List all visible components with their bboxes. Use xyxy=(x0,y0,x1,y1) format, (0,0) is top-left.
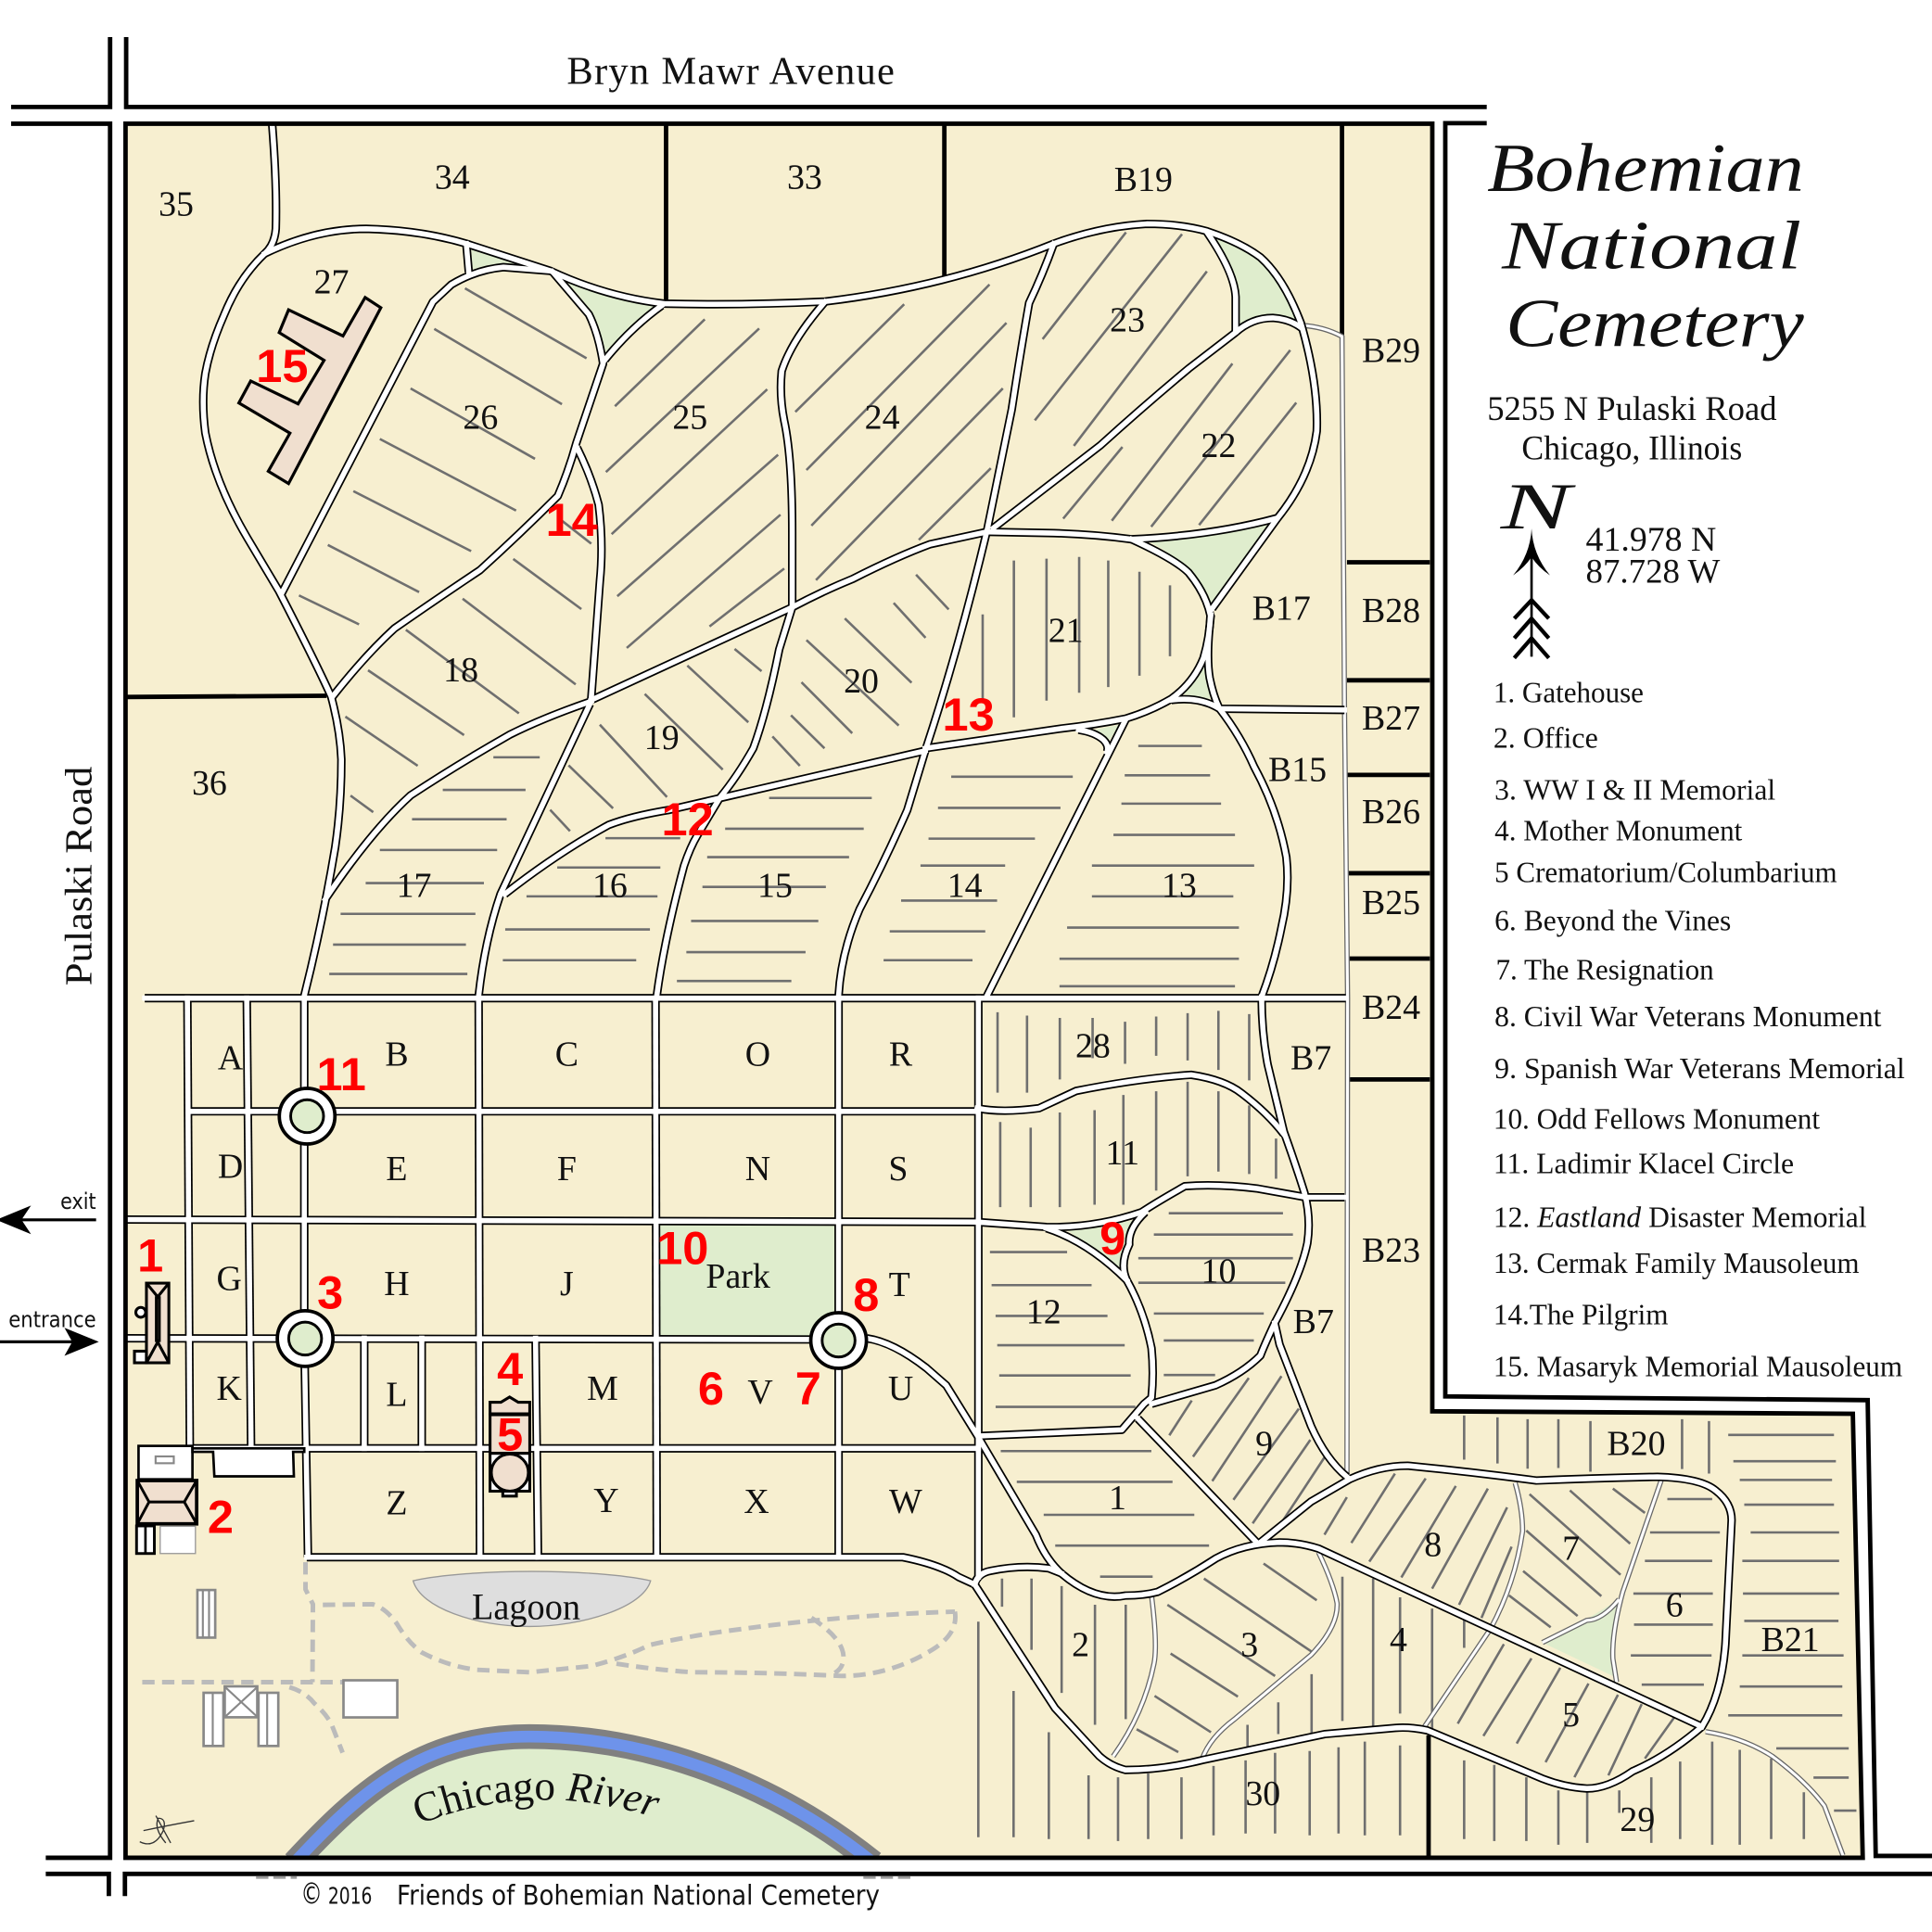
section number labels: 4 xyxy=(1390,1621,1407,1659)
marker 11: 11 xyxy=(316,1048,366,1100)
section number labels: 11 xyxy=(1106,1134,1139,1173)
river label: Chicago River xyxy=(414,1773,660,1821)
road network centre xyxy=(126,123,1732,1788)
section number labels: 36 xyxy=(192,764,227,803)
block letter labels: A xyxy=(218,1039,244,1078)
legend: 15. Masaryk Memorial Mausoleum xyxy=(1493,1351,1902,1383)
marker 4: 4 xyxy=(497,1342,523,1395)
section number labels: B28 xyxy=(1362,591,1420,630)
legend: 4. Mother Monument xyxy=(1494,814,1742,846)
green landscaped triangles and park xyxy=(471,233,1619,1676)
grey remnants under the south line xyxy=(256,1876,913,1878)
block letter labels: D xyxy=(218,1148,243,1187)
section number labels: 18 xyxy=(443,651,478,690)
marker 12: 12 xyxy=(662,793,714,845)
block letter labels: V xyxy=(747,1373,773,1412)
marker 9: 9 xyxy=(1099,1212,1125,1265)
section number labels: 3 xyxy=(1240,1625,1258,1664)
arrow: entrance xyxy=(0,1330,95,1353)
street name: Pulaski Road: Pulaski Road xyxy=(57,766,99,985)
section number labels: 17 xyxy=(397,867,431,906)
hatching: sections 1-9, 29, 30, B20, B21 xyxy=(978,1376,1856,1845)
section number labels: B17 xyxy=(1252,590,1311,629)
dashed service paths xyxy=(142,1562,956,1753)
section number labels: 1 xyxy=(1109,1479,1126,1518)
section number labels: 10 xyxy=(1201,1252,1236,1291)
address: Chicago, Illinois xyxy=(1521,430,1742,468)
block letter labels: Y xyxy=(593,1481,619,1520)
section number labels: 22 xyxy=(1201,426,1236,465)
marker 10: 10 xyxy=(656,1222,708,1275)
address xyxy=(1487,390,1777,468)
block letter labels: E xyxy=(386,1150,408,1188)
section number labels: 13 xyxy=(1162,867,1197,906)
title xyxy=(1487,131,1805,362)
section number labels: 14 xyxy=(947,867,983,906)
signature xyxy=(140,1816,194,1844)
marker 6: 6 xyxy=(698,1362,724,1415)
section number labels: 15 xyxy=(757,867,793,906)
block letter labels: F xyxy=(557,1150,577,1188)
section number labels xyxy=(159,158,1820,1839)
section number labels: 26 xyxy=(463,399,498,438)
section number labels: 12 xyxy=(1026,1292,1061,1331)
lagoon xyxy=(413,1571,651,1626)
compass: N xyxy=(1499,471,1577,543)
address: 5255 N Pulaski Road xyxy=(1487,390,1777,428)
block letter labels: U xyxy=(888,1369,913,1408)
marker 8: 8 xyxy=(853,1268,879,1321)
exit label: exit xyxy=(60,1188,96,1214)
block letter labels: K xyxy=(217,1369,242,1408)
section number labels: 5 xyxy=(1562,1696,1580,1735)
section number labels: 29 xyxy=(1620,1800,1655,1839)
block letter labels: J xyxy=(560,1265,574,1303)
legend: 13. Cermak Family Mausoleum xyxy=(1493,1247,1860,1279)
section number labels: 30 xyxy=(1245,1774,1280,1813)
section number labels: 33 xyxy=(787,158,822,197)
marker 7: 7 xyxy=(795,1362,821,1415)
section number labels: B19 xyxy=(1114,160,1173,199)
legend: 8. Civil War Veterans Monument xyxy=(1494,1000,1882,1033)
hatching: sections 20-24 xyxy=(919,233,1296,718)
section number labels: 27 xyxy=(314,262,349,301)
section number labels: 6 xyxy=(1666,1586,1684,1625)
building: gatehouse xyxy=(134,1283,169,1363)
legend: 1. Gatehouse xyxy=(1493,677,1644,709)
legend: 2. Office xyxy=(1493,722,1598,755)
building: crematorium and columbarium xyxy=(490,1397,529,1496)
section number labels: 7 xyxy=(1562,1530,1580,1569)
section number labels: 19 xyxy=(644,718,680,757)
block letter labels: B xyxy=(385,1036,409,1074)
thin paths centre xyxy=(1113,325,1843,1855)
section boundaries xyxy=(127,123,1430,1858)
copyright xyxy=(300,1875,880,1912)
section number labels: B25 xyxy=(1362,883,1420,922)
section number labels: 34 xyxy=(435,158,470,197)
block letter labels: O xyxy=(745,1036,770,1074)
section number labels: 28 xyxy=(1075,1026,1111,1065)
compass xyxy=(1499,471,1577,658)
legend: 3. WW I & II Memorial xyxy=(1494,774,1775,807)
section number labels: B29 xyxy=(1362,332,1420,371)
section number labels: 20 xyxy=(844,662,879,701)
block letter labels: C xyxy=(555,1036,578,1074)
section number labels: 21 xyxy=(1049,611,1084,650)
block letter labels: W xyxy=(889,1482,922,1521)
lagoon label: Lagoon xyxy=(472,1585,580,1627)
traffic circle: WW memorial xyxy=(277,1311,333,1366)
section number labels: 23 xyxy=(1110,301,1145,340)
marker 13: 13 xyxy=(943,688,995,741)
section number labels: B23 xyxy=(1362,1231,1420,1270)
block letter labels: N xyxy=(745,1150,770,1188)
legend: 5 Crematorium/Columbarium xyxy=(1494,857,1837,889)
hatching: sections 10-13, 28 xyxy=(990,746,1293,1376)
marker 2: 2 xyxy=(208,1490,234,1543)
section number labels: B20 xyxy=(1607,1425,1666,1464)
section number labels: 2 xyxy=(1072,1625,1089,1664)
copyright: Friends of Bohemian National Cemetery xyxy=(397,1880,880,1912)
block letter labels: Park xyxy=(705,1257,770,1296)
grey outbuildings xyxy=(197,1590,398,1746)
legend xyxy=(1493,677,1905,1383)
entrance label: entrance xyxy=(8,1306,96,1332)
legend: 12. Eastland Disaster Memorial xyxy=(1493,1201,1867,1234)
traffic circle: Klacel xyxy=(279,1088,335,1144)
copyright: © 2016 xyxy=(300,1875,372,1911)
coordinates: 87.728 W xyxy=(1586,553,1721,591)
marker 5: 5 xyxy=(497,1407,523,1460)
building: office xyxy=(136,1446,304,1554)
section number labels: 35 xyxy=(159,185,194,224)
legend: 11. Ladimir Klacel Circle xyxy=(1493,1147,1794,1179)
hatching: sections 18, 25, 26 xyxy=(299,288,784,713)
section number labels: 9 xyxy=(1255,1425,1273,1464)
marker 15: 15 xyxy=(256,339,308,392)
block letter labels: S xyxy=(888,1150,908,1188)
legend: 9. Spanish War Veterans Memorial xyxy=(1494,1052,1905,1085)
marker 1: 1 xyxy=(137,1229,163,1282)
title: Bohemian xyxy=(1487,131,1804,207)
block letter labels: X xyxy=(744,1482,769,1521)
section number labels: B21 xyxy=(1761,1621,1820,1659)
section number labels: 8 xyxy=(1424,1526,1442,1565)
legend: 10. Odd Fellows Monument xyxy=(1493,1102,1820,1135)
legend: 6. Beyond the Vines xyxy=(1494,904,1731,936)
traffic circle: civil war xyxy=(811,1313,867,1368)
section number labels: B15 xyxy=(1268,751,1327,790)
hatching: section 24 long strokes and section 20 xyxy=(772,285,1007,766)
marker 3: 3 xyxy=(317,1265,343,1318)
section number labels: 25 xyxy=(672,399,707,438)
block letter labels: Z xyxy=(386,1483,408,1522)
section number labels: B24 xyxy=(1362,988,1420,1027)
block letter labels: L xyxy=(386,1375,408,1414)
arrow: exit xyxy=(0,1209,96,1231)
block letter labels: T xyxy=(889,1265,910,1304)
legend: 14.The Pilgrim xyxy=(1493,1299,1669,1331)
block letter labels: H xyxy=(384,1265,410,1303)
chicago river xyxy=(295,1736,878,1868)
section number labels: B7 xyxy=(1290,1039,1331,1078)
coordinates: 41.978 N xyxy=(1586,521,1717,559)
section number labels: B27 xyxy=(1362,699,1420,738)
marker 14: 14 xyxy=(546,493,598,546)
title: Cemetery xyxy=(1506,286,1805,362)
block letter labels: R xyxy=(889,1036,913,1074)
section number labels: 24 xyxy=(865,399,900,438)
road network outline xyxy=(126,123,1732,1788)
section number labels: B7 xyxy=(1293,1303,1334,1341)
section number labels: B26 xyxy=(1362,793,1420,832)
block letter labels: G xyxy=(217,1260,242,1299)
title: National xyxy=(1501,209,1801,285)
thin paths outline xyxy=(1113,325,1843,1855)
coordinates xyxy=(1586,521,1721,591)
hatching: sections 14-19 xyxy=(329,649,1073,981)
section number labels: 16 xyxy=(592,867,628,906)
legend: 7. The Resignation xyxy=(1495,954,1714,986)
block letter labels: M xyxy=(587,1369,618,1408)
block letter labels xyxy=(217,1036,922,1522)
street name: Bryn Mawr Avenue: Bryn Mawr Avenue xyxy=(566,49,895,93)
building: Masaryk mausoleum xyxy=(239,298,381,484)
